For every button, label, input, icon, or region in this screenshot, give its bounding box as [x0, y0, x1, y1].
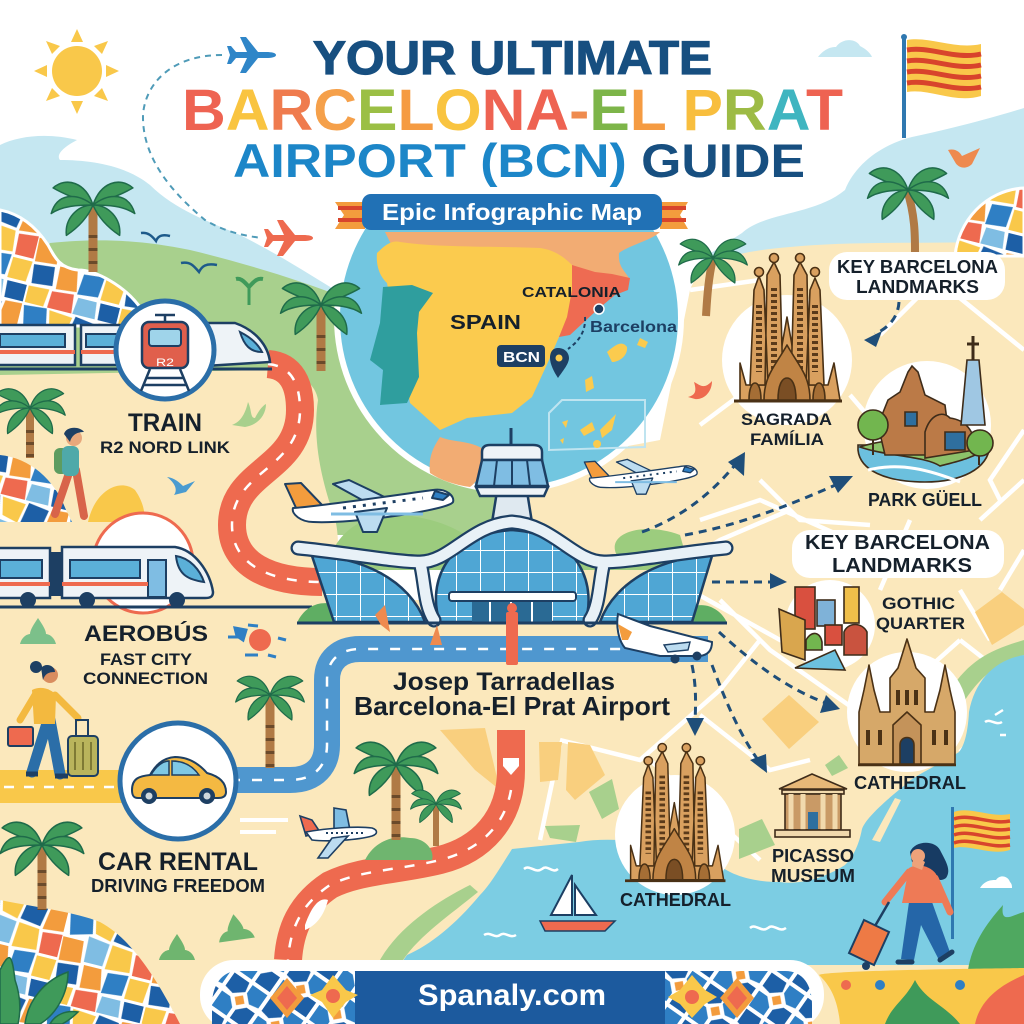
- label: Aerobus: [83, 621, 208, 688]
- icon: blue plane: [227, 37, 276, 73]
- icon: cloud bottom: [980, 876, 1012, 888]
- landmark: Sagrada Familia top: [722, 254, 852, 425]
- bubble: key landmarks top: KEY BARCELONA: [837, 257, 998, 277]
- label: Gothic Quarter: [876, 594, 965, 633]
- flag: bottom Catalan: [951, 807, 1010, 939]
- decor: small motif: [228, 625, 286, 657]
- footer: right mosaic: [665, 971, 812, 1024]
- arrow to Sagrada: [642, 465, 735, 532]
- ribbon tail right: [660, 202, 688, 229]
- title line 1: YOUR ULTIMATE: [313, 31, 712, 84]
- label: Barcelona: Barcelona: [590, 319, 677, 336]
- palm 9: [0, 822, 84, 910]
- mosaic: bottom left: [0, 900, 180, 1024]
- background: sunrise arc: [93, 513, 193, 613]
- road: blue airport road: [230, 649, 708, 780]
- ribbon banner: Epic Infographic Map: [382, 199, 642, 225]
- background: right sea wave: [700, 108, 1024, 260]
- road: red south road: [288, 730, 519, 960]
- palm 3: [0, 389, 65, 458]
- label: train: R2 NORD LINK: [100, 438, 231, 457]
- map: Spain: [377, 242, 575, 430]
- entrance canopy: [449, 592, 576, 601]
- airport terminal: [297, 428, 727, 623]
- mosaic: left middle: [0, 455, 72, 522]
- entrance doors: [472, 602, 552, 622]
- label: Picasso Museum: MUSEUM: [771, 866, 855, 886]
- palm 1: [51, 182, 135, 272]
- map: Portugal: [370, 285, 433, 405]
- arrow to Cathedral bottom: [692, 665, 696, 722]
- map: North Africa: [430, 437, 485, 487]
- city street grid: [540, 258, 1024, 860]
- footer: site name: Spanaly.com: [418, 979, 606, 1012]
- background: sand land: [0, 240, 1024, 1024]
- landmark: Park Guell: [858, 336, 993, 489]
- background: left sea sky wave: [0, 136, 345, 400]
- map: France: [385, 232, 660, 280]
- sea waves: [484, 710, 1006, 936]
- icon: red plane: [264, 220, 313, 256]
- control tower: [476, 428, 548, 535]
- arrow to Gothic Quarter: [712, 580, 772, 584]
- footer: left mosaic: [212, 971, 358, 1024]
- right wing glass: [600, 556, 712, 622]
- arrow to Picasso: [712, 665, 758, 760]
- BCN badge: [497, 345, 545, 367]
- small green shrubs: [297, 603, 727, 623]
- label: Spain: SPAIN: [450, 312, 521, 334]
- road: yellow path: [0, 770, 125, 803]
- icon: orange bird: [948, 148, 980, 168]
- palm 2: [281, 283, 361, 371]
- title line 2: BARCELONA-EL PRAT: [182, 78, 843, 143]
- bubble: key landmarks lower: [792, 530, 1004, 578]
- left wing glass: [312, 556, 425, 622]
- ground line: [297, 622, 727, 624]
- landmark: Gothic Quarter: [779, 580, 875, 670]
- dashed link: [568, 317, 585, 349]
- roof: [298, 522, 726, 620]
- figure: hiker: [54, 428, 84, 516]
- figure: traveler bottom right: [849, 843, 952, 970]
- coast green strip: [950, 640, 1024, 700]
- label: airport name: Josep Tarradellas: [393, 668, 615, 696]
- label: airport name: Barcelona-El Prat Airport: [354, 691, 670, 721]
- icon: map pin: [550, 348, 569, 378]
- small plane: [300, 808, 376, 858]
- label: Picasso Museum: [771, 846, 855, 886]
- palm 5: [679, 239, 747, 316]
- bubble: key landmarks lower: KEY BARCELONA: [805, 532, 990, 554]
- Barcelona dot: [594, 304, 604, 314]
- sea: [400, 655, 1024, 965]
- icon circle: train: R2: [156, 357, 174, 369]
- ground: bottom right: [819, 968, 1024, 1024]
- ribbon tail left: [335, 202, 365, 229]
- sprout: [236, 279, 263, 305]
- arrow to Sagrada from bubble: [875, 302, 899, 334]
- mosaic: top left: [0, 210, 150, 326]
- label: Aerobus: CONNECTION: [83, 669, 208, 688]
- label: Picasso Museum: PICASSO: [772, 846, 854, 866]
- background: left green hill: [0, 240, 500, 535]
- label: Aerobus: FAST CITY: [100, 650, 193, 669]
- label: Sagrada Familia: FAMÍLIA: [750, 430, 824, 449]
- plane: right above terminal: [584, 459, 697, 494]
- footer: center strip: [355, 971, 665, 1024]
- grass tufts: [20, 402, 266, 960]
- icon: red bird: [688, 381, 712, 399]
- bubble: key landmarks top: LANDMARKS: [856, 277, 979, 297]
- city blocks: [440, 592, 1024, 859]
- title line 3: AIRPORT (BCN) GUIDE: [233, 134, 805, 187]
- marker: red figure: [506, 603, 518, 665]
- label: Cathedral right: CATHEDRAL: [854, 773, 966, 793]
- decor: yellow mound: [88, 485, 145, 522]
- arrow to Park Guell: [685, 483, 840, 535]
- label: Park Guell: PARK GÜELL: [868, 490, 982, 510]
- landmark: Cathedral bottom: [615, 744, 735, 895]
- arrow heads: [686, 331, 882, 773]
- dashed arrows: [642, 302, 899, 760]
- map globe: [334, 228, 684, 490]
- grass lower 2: [216, 912, 255, 943]
- palm 8: [410, 790, 462, 846]
- train: Aerobus: [0, 547, 312, 608]
- arrow to Cathedral right: [719, 632, 826, 703]
- landmark: Picasso Museum: [775, 774, 850, 837]
- label: train: TRAIN: [128, 409, 202, 437]
- grass near aerobus: [20, 618, 56, 644]
- flag: top Catalan: [901, 34, 981, 138]
- label: car rental: CAR RENTAL: [98, 848, 258, 876]
- label: Sagrada Familia: SAGRADA: [741, 410, 832, 429]
- label: car rental: [91, 848, 265, 896]
- label: airport name: [354, 668, 670, 721]
- dashed flight path: [143, 55, 262, 238]
- sea pier: [872, 798, 901, 842]
- sailboat: [540, 875, 615, 931]
- road: red train road: [232, 364, 322, 582]
- landmark: Cathedral right: [847, 639, 967, 772]
- map: Canary islands box: [549, 400, 645, 450]
- coast green lower strip: [380, 885, 478, 960]
- palm 6: [236, 676, 304, 768]
- icon: blue bird: [167, 477, 195, 495]
- label: Catalonia: CATALONIA: [522, 284, 621, 301]
- BCN badge: BCN: [503, 349, 540, 366]
- palm 7: [354, 742, 438, 840]
- background: green hills behind terminal: [333, 514, 690, 570]
- bubble: key landmarks top: [829, 252, 1005, 300]
- bubble: key landmarks lower: LANDMARKS: [832, 555, 972, 577]
- icon circle: car: [120, 723, 236, 839]
- icon circle: train: [116, 301, 214, 399]
- icons: birds: [141, 233, 217, 272]
- label: Gothic Quarter: GOTHIC: [882, 594, 955, 613]
- label: Sagrada Familia: [741, 410, 832, 449]
- palm trees: [0, 168, 948, 910]
- map: Catalonia: [559, 265, 630, 337]
- label: Aerobus: AEROBÚS: [84, 621, 208, 646]
- plants bottom right: [968, 905, 1024, 970]
- train: R2 high speed: [0, 323, 272, 369]
- markers: cones: [375, 605, 442, 645]
- ribbon banner: [335, 194, 688, 230]
- map: Balearic islands: [585, 338, 648, 392]
- mosaic: top right: [955, 188, 1024, 256]
- label: Cathedral bottom: CATHEDRAL: [620, 890, 731, 910]
- grass near train: [232, 402, 266, 427]
- icon: sun: [34, 29, 119, 114]
- label: train: [100, 409, 231, 457]
- grass lower: [159, 934, 195, 960]
- central glass dome: [436, 530, 589, 622]
- palm 4: [868, 168, 948, 252]
- label: Gothic Quarter: QUARTER: [876, 614, 965, 633]
- plane: on runway: [617, 614, 712, 664]
- title: [182, 31, 843, 187]
- palm 7 hill: [365, 837, 433, 860]
- figure: traveler with suitcase: [8, 661, 98, 776]
- footer: banner: [200, 960, 824, 1024]
- icon: cloud top: [818, 40, 872, 57]
- plants bottom left: [0, 958, 78, 1024]
- decor: speed lines: [240, 820, 288, 832]
- label: car rental: DRIVING FREEDOM: [91, 876, 265, 896]
- plane: left at terminal: [285, 480, 453, 532]
